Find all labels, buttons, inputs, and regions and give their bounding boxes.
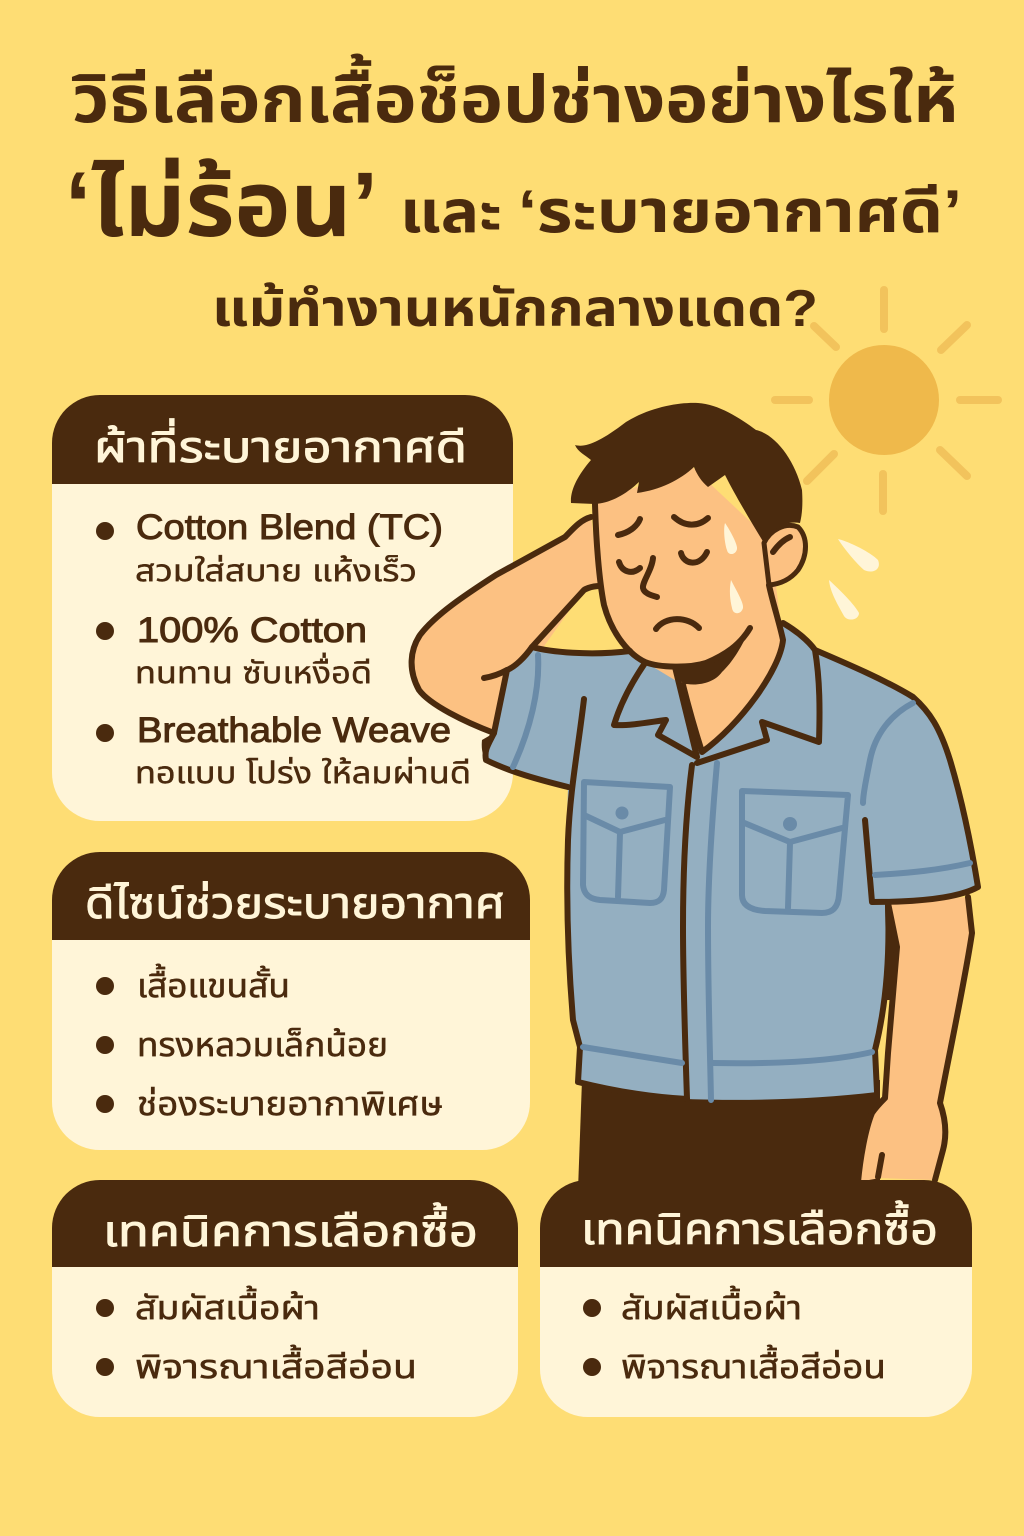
panel header: ventilating design xyxy=(52,852,530,940)
list: design features: ทรงหลวมเล็กน้อย xyxy=(137,1026,388,1063)
pants xyxy=(578,1080,880,1190)
panel header: breathable fabrics xyxy=(52,395,513,484)
head and neck xyxy=(595,465,783,752)
list: design features: ช่องระบายอากาพิเศษ xyxy=(137,1085,443,1122)
hair xyxy=(571,403,802,543)
icon: sun xyxy=(775,290,998,511)
raised arm xyxy=(412,517,600,733)
panel header: ventilating design: ดีไซน์ช่วยระบายอากาศ xyxy=(85,880,505,928)
list: fabric options: 100% Cotton xyxy=(137,611,367,650)
panel: ventilating design xyxy=(52,852,530,1150)
panel: buying tips right xyxy=(540,1180,972,1417)
panel: buying tips left xyxy=(52,1180,518,1417)
list: fabric options: สวมใส่สบาย แห้งเร็ว xyxy=(135,555,417,588)
panel header: breathable fabrics: ผ้าที่ระบายอากาศดี xyxy=(94,418,467,472)
panel header: buying tips left xyxy=(52,1180,518,1267)
panel header: buying tips right: เทคนิคการเลือกซื้อ xyxy=(581,1200,938,1254)
list: fabric options: ทนทาน ซับเหงื่อดี xyxy=(135,652,372,690)
list: fabric options: Cotton Blend (TC) xyxy=(136,508,443,547)
right forearm xyxy=(858,897,972,1182)
title: แม้ทำงานหนักกลางแดด? xyxy=(212,280,818,338)
list: buying tips right: สัมผัสเนื้อผ้า xyxy=(621,1285,802,1326)
panel header: buying tips left: เทคนิคการเลือกซื้อ xyxy=(103,1202,478,1256)
shirt seams and pockets xyxy=(513,655,970,1100)
list: design features xyxy=(96,963,443,1122)
chin shadow xyxy=(675,628,750,684)
list: buying tips right xyxy=(583,1285,886,1385)
list: design features: เสื้อแขนสั้น xyxy=(137,963,290,1004)
face features xyxy=(618,517,708,629)
title: ‘ระบายอากาศดี’ xyxy=(518,178,962,245)
list: buying tips left: พิจารณาเสื้อสีอ่อน xyxy=(135,1344,417,1385)
list: buying tips left: สัมผัสเนื้อผ้า xyxy=(135,1285,320,1326)
title: วิธีเลือกเสื้อช็อปช่างอย่างไรให้ xyxy=(71,53,958,136)
shirt body xyxy=(486,623,978,1100)
list: fabric options: ทอแบบ โปร่ง ให้ลมผ่านดี xyxy=(135,757,471,790)
illustration: hot tired worker xyxy=(412,403,978,1190)
list: fabric options: Breathable Weave xyxy=(137,711,451,750)
title: และ xyxy=(400,178,502,245)
title: ‘ไม่ร้อน’ xyxy=(65,154,378,256)
title xyxy=(65,53,962,338)
outlines xyxy=(412,504,978,1182)
list: fabric options xyxy=(96,508,471,790)
sleeve shadow xyxy=(482,733,496,765)
ear xyxy=(764,525,806,585)
underarm shadow xyxy=(885,903,897,1000)
list: buying tips left xyxy=(96,1285,417,1385)
panel: breathable fabrics xyxy=(52,395,513,821)
sweat drops xyxy=(724,523,879,620)
panel header: buying tips right xyxy=(540,1180,972,1267)
list: buying tips right: พิจารณาเสื้อสีอ่อน xyxy=(621,1344,886,1385)
